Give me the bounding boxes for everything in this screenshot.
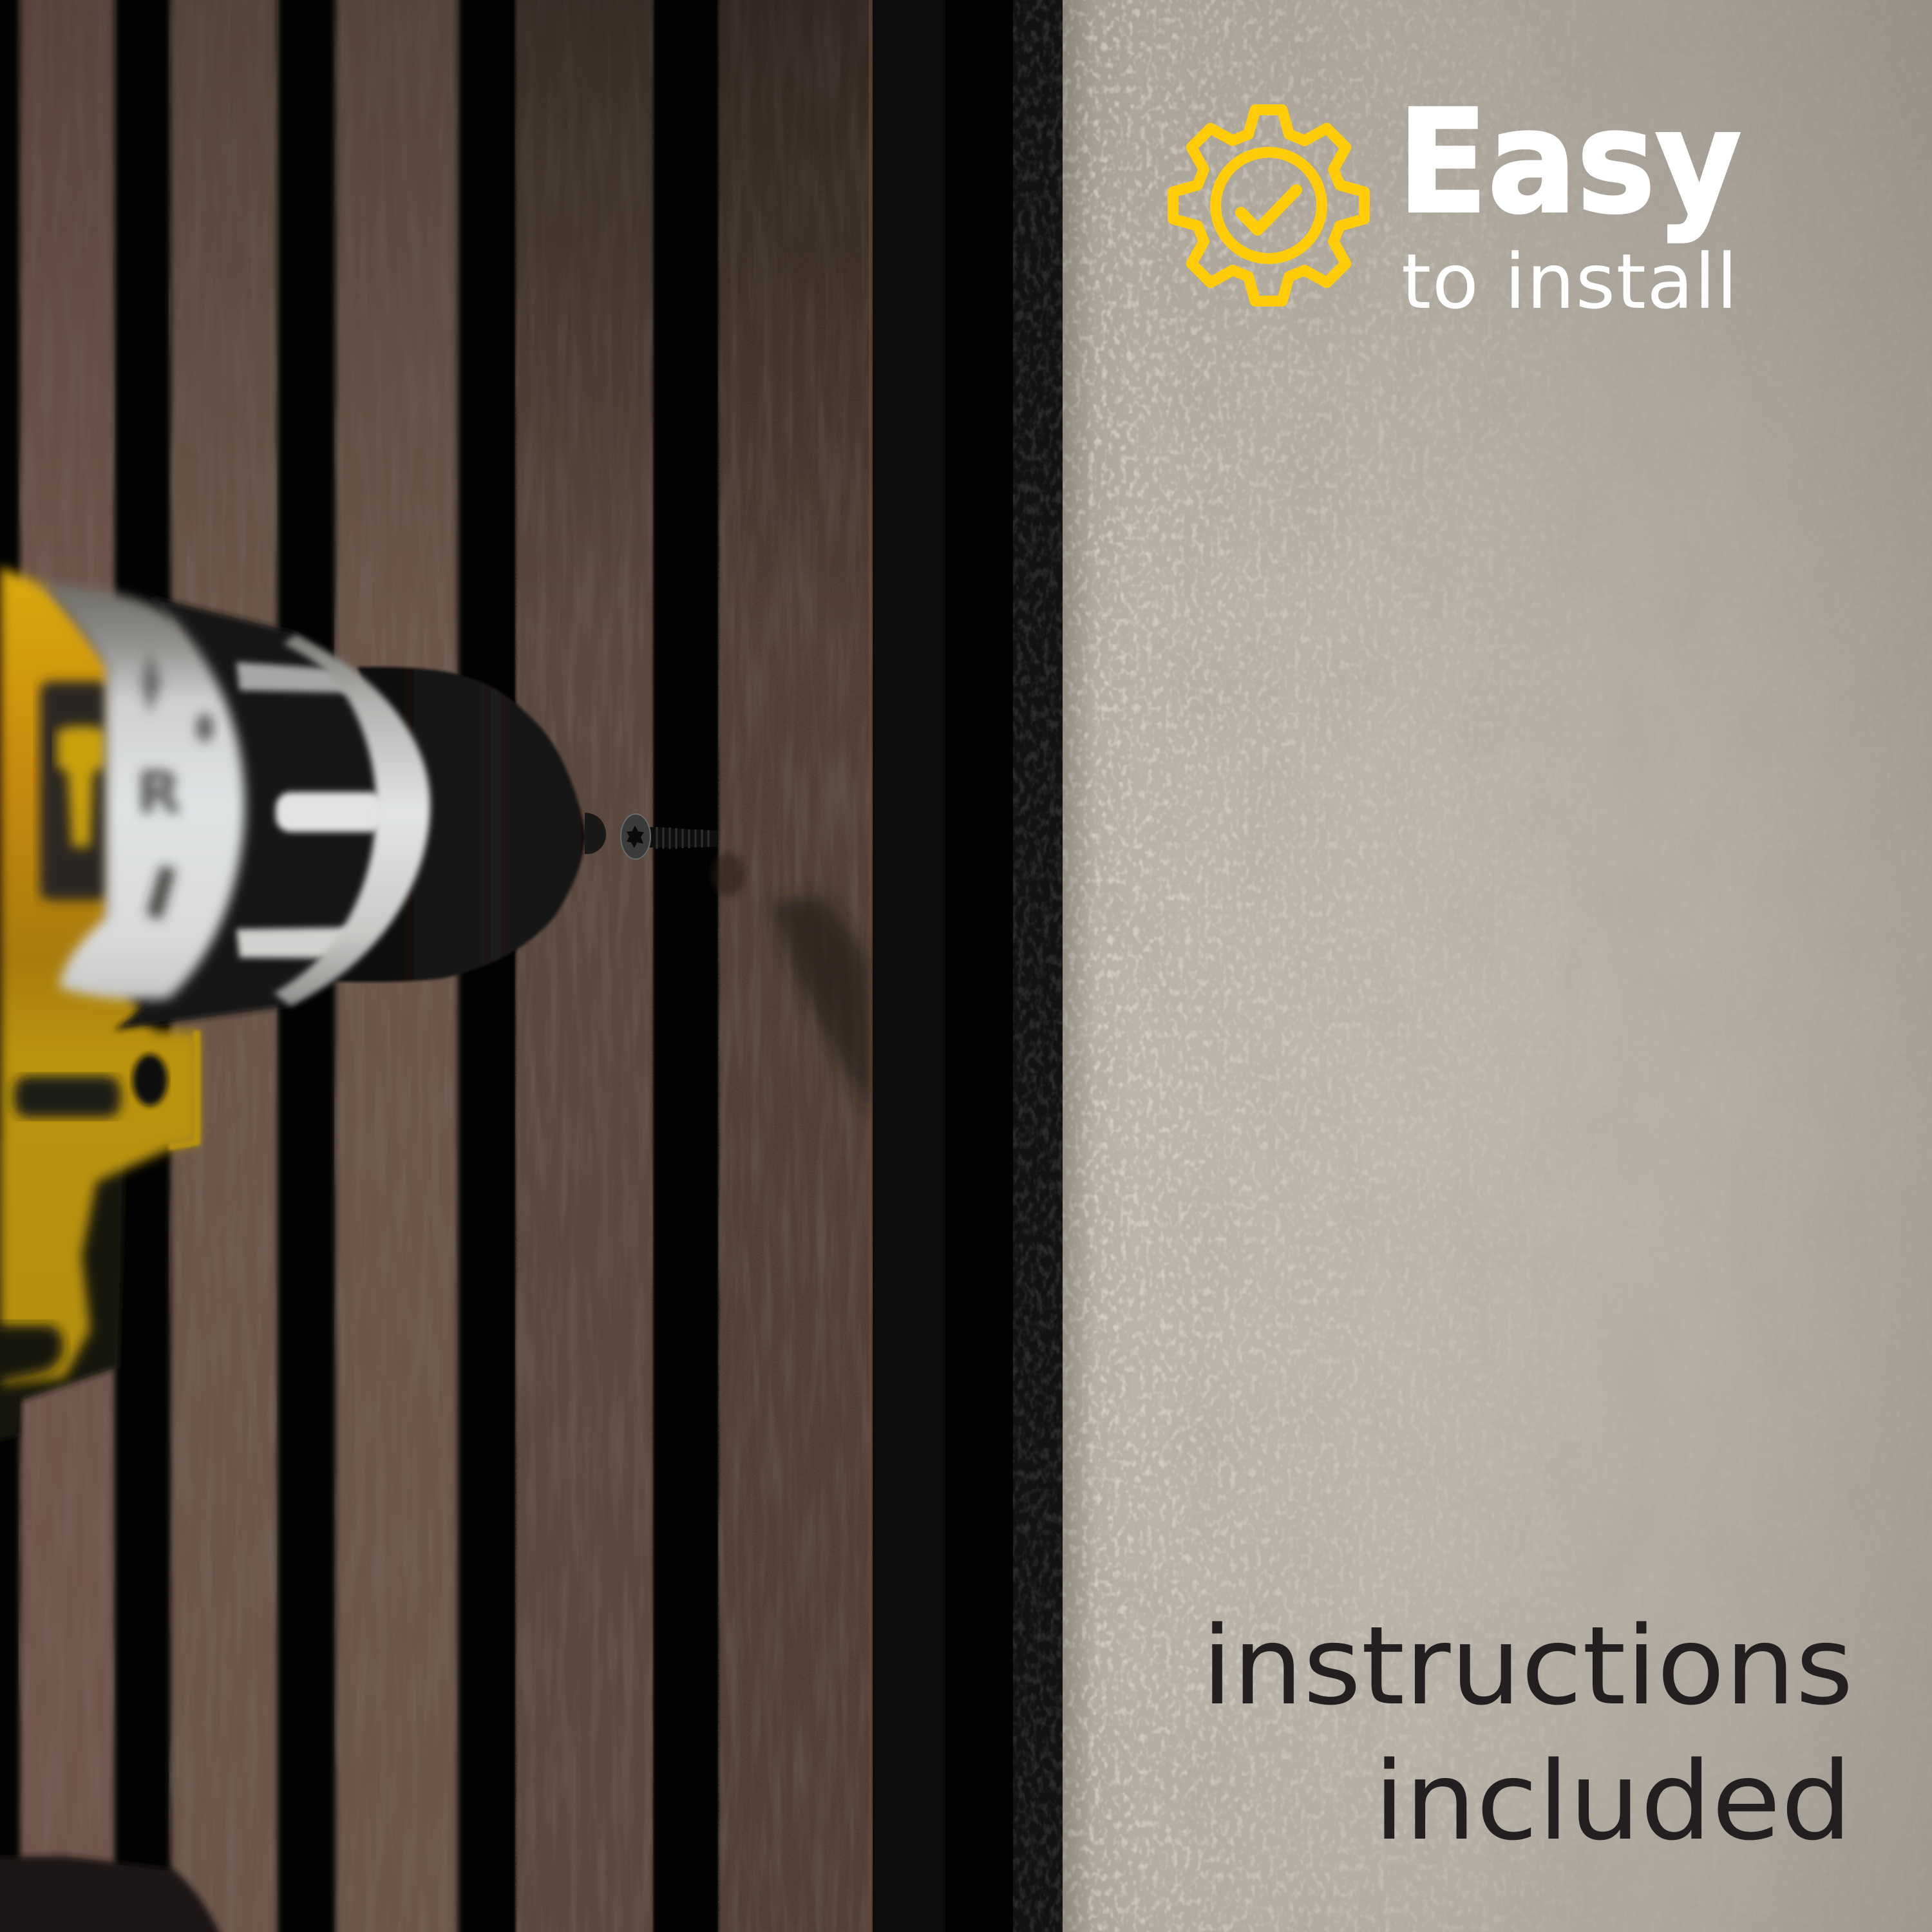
drill silver dial — [39, 583, 245, 999]
caption: instructions included: instructions — [1202, 1603, 1853, 1729]
drill silver ring — [274, 634, 430, 1006]
subheading: to install: to install — [1401, 237, 1738, 326]
wooden slats — [0, 0, 902, 1932]
plaster wall — [1063, 0, 1932, 1932]
caption: instructions included — [1202, 1603, 1853, 1864]
drill bit — [585, 813, 606, 854]
drill screw hole — [133, 1054, 167, 1106]
slat shadow patches on the nearest slat — [711, 853, 873, 1114]
drill black collar — [113, 596, 390, 1030]
dark side panel of the wall cladding — [873, 0, 1063, 1932]
drill battery base — [0, 1856, 225, 1932]
screw head — [621, 814, 650, 859]
icon: yellow gear with check mark — [1173, 109, 1364, 301]
drill yellow body — [0, 567, 198, 1385]
drill nose cone — [328, 667, 586, 982]
drill dial markings: R — [137, 759, 181, 827]
drill yellow lip highlight — [169, 1030, 200, 1150]
slats out of focus — [20, 0, 458, 1932]
slats in focus — [516, 0, 873, 1932]
background: black slat backing — [0, 0, 1069, 1932]
wood grain texture — [0, 0, 902, 1932]
drill handle black patch — [0, 1325, 63, 1385]
drill dark logo plate — [40, 681, 111, 900]
caption: instructions included: included — [1374, 1738, 1852, 1864]
drill button slot — [14, 1076, 120, 1117]
drill logo mark — [57, 726, 106, 847]
screw shaft — [648, 827, 718, 848]
drill handle dark grip — [0, 1140, 126, 1443]
reddish rim of nearest slat — [869, 0, 873, 1932]
drill dial markings — [137, 650, 213, 920]
power drill — [0, 567, 606, 1932]
screw star drive — [627, 826, 644, 848]
heading: Easy: Easy — [1397, 80, 1741, 245]
screw — [621, 814, 718, 859]
drill collar bars — [236, 662, 385, 958]
